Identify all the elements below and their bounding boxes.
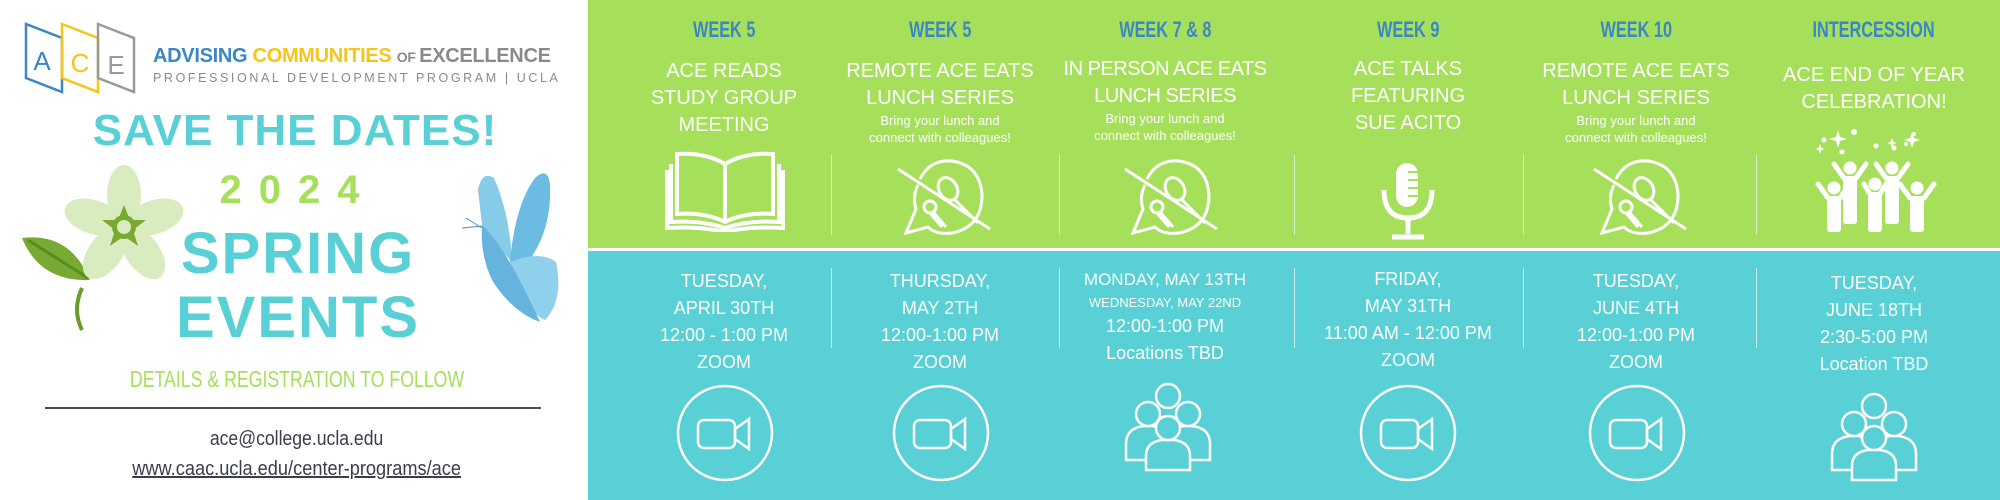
panel: week 5 ace reads: [651, 17, 797, 136]
panel: week 7 & 8: [1064, 17, 1266, 143]
dates: week 5: ZOOM: [697, 352, 751, 372]
panel: week 7 & 8: WEEK 7 & 8: [1119, 17, 1211, 42]
dates: monday/wednesday: Locations TBD: [1106, 343, 1224, 363]
panel: green top band: [588, 0, 2000, 248]
panel: week 9: SUE ACITO: [1355, 112, 1461, 134]
panel: week 5 ace reads: STUDY GROUP: [651, 87, 797, 109]
dates: intercession: TUESDAY,: [1831, 273, 1917, 293]
icon: microphone: [1382, 163, 1434, 240]
icon: lunch week 5: [897, 159, 991, 236]
panel: intercession: INTERCESSION: [1813, 17, 1935, 42]
dates: week 5: APRIL 30TH: [674, 298, 774, 318]
panel: intercession: [1783, 17, 1965, 113]
icon: group people 2: [1830, 392, 1918, 482]
dates: week 10: [1577, 271, 1695, 372]
dates: week 5: 12:00 - 1:00 PM: [660, 325, 788, 345]
panel: week 9: FEATURING: [1351, 85, 1465, 107]
title: spring events: [176, 221, 420, 350]
dates: thursday: MAY 2TH: [902, 298, 978, 318]
dates: monday/wednesday: MONDAY, MAY 13TH: [1084, 270, 1246, 289]
dates: week 10: TUESDAY,: [1593, 271, 1679, 291]
panel: week 5 remote ace eats: Bring your lunch and: [880, 113, 1000, 128]
title: spring events: EVENTS: [176, 285, 420, 350]
icon: zoom video 4: [1588, 384, 1686, 482]
panel: cyan bottom band: [588, 251, 2000, 500]
panel: week 7 & 8: connect with colleagues!: [1094, 128, 1236, 143]
panel: week 10: WEEK 10: [1600, 17, 1672, 42]
dates: thursday: 12:00-1:00 PM: [881, 325, 999, 345]
dates: week 5: [660, 271, 788, 372]
icon: butterfly: [462, 173, 558, 322]
dates: week 5: TUESDAY,: [681, 271, 767, 291]
icon: zoom video 1: [676, 384, 774, 482]
dates: intercession: Location TBD: [1820, 354, 1928, 374]
text: contact: [132, 428, 462, 480]
panel: week 5 ace reads: MEETING: [678, 114, 770, 136]
column dividers: [831, 155, 832, 235]
panel: week 7 & 8: IN PERSON ACE EATS: [1064, 58, 1266, 80]
panel: week 9: WEEK 9: [1377, 17, 1439, 42]
logo: [24, 22, 560, 94]
text: contact: www.caac.ucla.edu/center-programs/ace: [133, 458, 461, 480]
dates: monday/wednesday: WEDNESDAY, MAY 22ND: [1089, 295, 1241, 310]
icon: book: [665, 152, 785, 232]
dates: week 9: ZOOM: [1381, 350, 1435, 370]
panel: week 5 remote ace eats: WEEK 5: [909, 17, 971, 42]
panel: week 10: LUNCH SERIES: [1562, 87, 1710, 109]
dates: week 9: [1324, 269, 1492, 370]
dates: thursday: ZOOM: [913, 352, 967, 372]
dates: week 9: MAY 31TH: [1365, 296, 1451, 316]
panel: week 10: REMOTE ACE EATS: [1542, 60, 1730, 82]
panel: week 9: [1351, 17, 1465, 134]
icon: lunch week 10: [1593, 159, 1687, 236]
dates: monday/wednesday: [1084, 270, 1246, 363]
year: 2024: [220, 168, 376, 212]
panel: intercession: CELEBRATION!: [1801, 91, 1947, 113]
dates: thursday: [881, 271, 999, 372]
dates: week 9: FRIDAY,: [1374, 269, 1442, 289]
icon: zoom video 3: [1360, 384, 1456, 482]
icon: lunch week 7&8: [1124, 159, 1218, 236]
logo: ADVISING COMMUNITIES OF EXCELLENCE: [153, 45, 551, 67]
dates: week 9: 11:00 AM - 12:00 PM: [1324, 323, 1492, 343]
panel: intercession: ACE END OF YEAR: [1783, 64, 1965, 86]
dates: intercession: [1820, 273, 1928, 374]
panel: week 5 remote ace eats: REMOTE ACE EATS: [846, 60, 1034, 82]
panel: week 7 & 8: LUNCH SERIES: [1094, 85, 1236, 107]
panel: week 10: Bring your lunch and: [1576, 113, 1696, 128]
text: contact: ace@college.ucla.edu: [210, 428, 384, 450]
logo: A: [33, 46, 51, 76]
logo: C: [71, 48, 89, 78]
panel: week 5 remote ace eats: connect with colleagues!: [869, 130, 1011, 145]
panel: week 5 ace reads: ACE READS: [666, 60, 782, 82]
icon: flower: [22, 165, 184, 331]
white separator line: [588, 248, 2000, 251]
logo: PROFESSIONAL DEVELOPMENT PROGRAM | UCLA: [153, 71, 560, 85]
panel: week 9: ACE TALKS: [1354, 58, 1462, 80]
dates: week 10: ZOOM: [1609, 352, 1663, 372]
icon: group people 1: [1124, 382, 1212, 472]
dates: intercession: 2:30-5:00 PM: [1820, 327, 1928, 347]
panel: week 5 remote ace eats: [846, 17, 1034, 145]
text: details: DETAILS & REGISTRATION TO FOLLOW: [130, 366, 464, 392]
dates: monday/wednesday: 12:00-1:00 PM: [1106, 316, 1224, 336]
icon: celebration: [1815, 129, 1936, 232]
icon: zoom video 2: [892, 384, 990, 482]
dates: week 10: JUNE 4TH: [1593, 298, 1679, 318]
title: spring events: SPRING: [181, 221, 415, 286]
panel: week 5 remote ace eats: LUNCH SERIES: [866, 87, 1014, 109]
dates: week 10: 12:00-1:00 PM: [1577, 325, 1695, 345]
dates: intercession: JUNE 18TH: [1826, 300, 1922, 320]
panel: week 5 ace reads: WEEK 5: [693, 17, 755, 42]
panel: week 7 & 8: Bring your lunch and: [1105, 111, 1225, 126]
logo: E: [107, 50, 125, 80]
title: save the dates: SAVE THE DATES!: [93, 106, 497, 155]
dates: thursday: THURSDAY,: [890, 271, 990, 291]
panel: week 10: [1542, 17, 1730, 145]
panel: week 10: connect with colleagues!: [1565, 130, 1707, 145]
